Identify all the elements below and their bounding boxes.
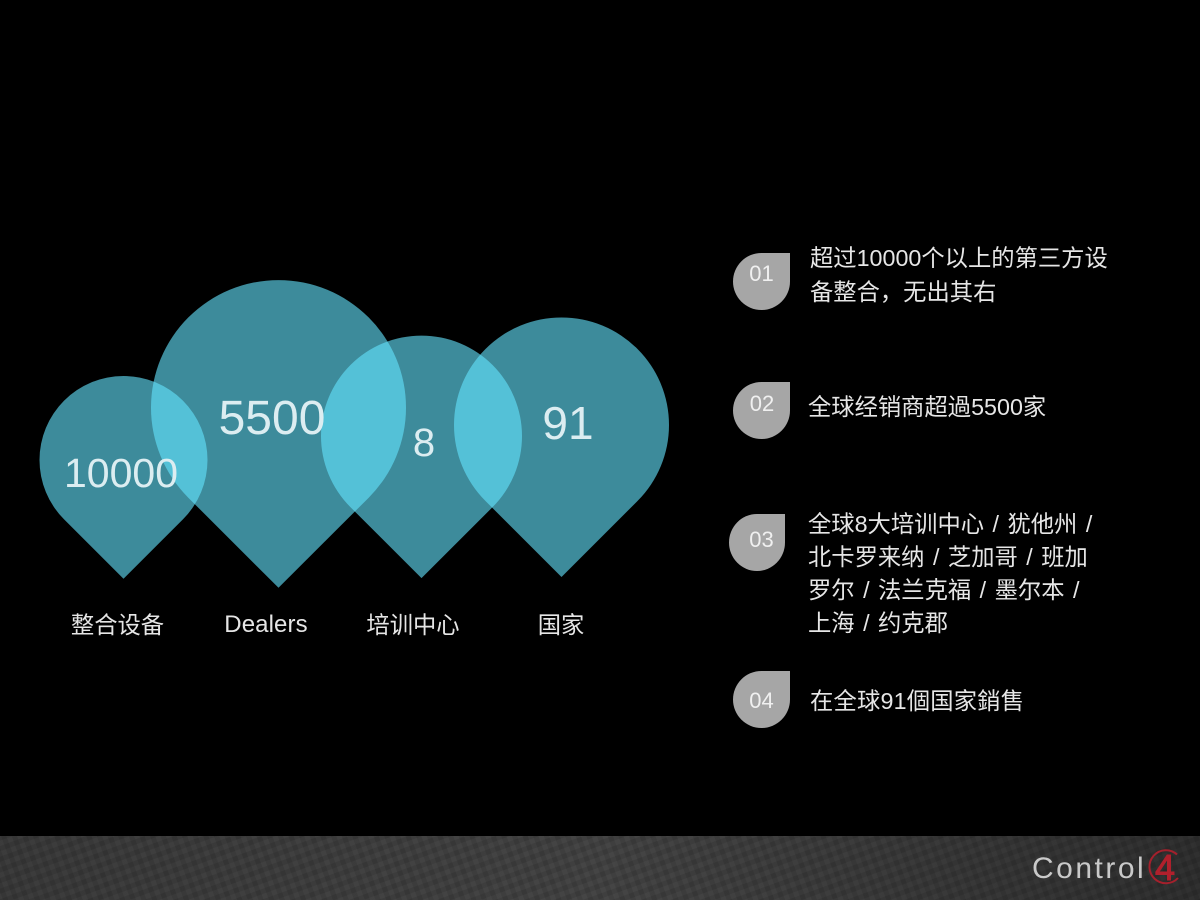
footer bar — [0, 836, 1200, 900]
item text 02: 全球经销商超過5500家 — [808, 394, 1046, 420]
badge 04 — [733, 671, 790, 728]
drop: 5500 — [151, 280, 406, 588]
item 02 — [733, 382, 1046, 439]
item 01 — [733, 245, 1108, 310]
badge 02 — [733, 382, 790, 439]
item text 01: 超过10000个以上的第三方设 — [810, 245, 1108, 271]
value: 5500: 5500 — [219, 392, 325, 445]
item text 01: 备整合，无出其右 — [810, 279, 996, 305]
item text 03: 全球8大培训中心 / 犹他州 / — [808, 511, 1093, 537]
drop: 8 — [321, 336, 522, 578]
chart: overlapping teardrops — [40, 280, 669, 638]
label: 国家: 国家 — [538, 612, 584, 638]
logo: Control4: 4 — [1155, 847, 1175, 888]
label: 培训中心: 培训中心 — [366, 612, 460, 638]
item text 04: 在全球91個国家銷售 — [810, 688, 1024, 714]
item text 03: 罗尔 / 法兰克福 / 墨尔本 / — [808, 577, 1080, 603]
badge number 04: 04 — [749, 688, 774, 713]
item 03 — [729, 511, 1093, 636]
badge number 02: 02 — [750, 391, 774, 416]
logo: Control4 — [1032, 847, 1178, 888]
item text 03: 北卡罗来纳 / 芝加哥 / 班加 — [808, 544, 1088, 570]
badge number 03: 03 — [749, 527, 774, 552]
item text 03: 上海 / 约克郡 — [808, 610, 948, 636]
item 04 — [733, 671, 1024, 728]
value: 91: 91 — [542, 397, 594, 449]
value: 8: 8 — [413, 421, 435, 465]
label: 整合设备: 整合设备 — [71, 612, 164, 638]
drop: 10000 — [40, 376, 208, 579]
badge number 01: 01 — [749, 261, 774, 286]
label: Dealers: Dealers — [224, 611, 308, 638]
badge 03 — [729, 514, 785, 571]
badge 01 — [733, 253, 790, 310]
drop: 91 — [454, 317, 669, 577]
logo: Control4: Control — [1032, 852, 1146, 885]
value: 10000: 10000 — [64, 450, 178, 496]
